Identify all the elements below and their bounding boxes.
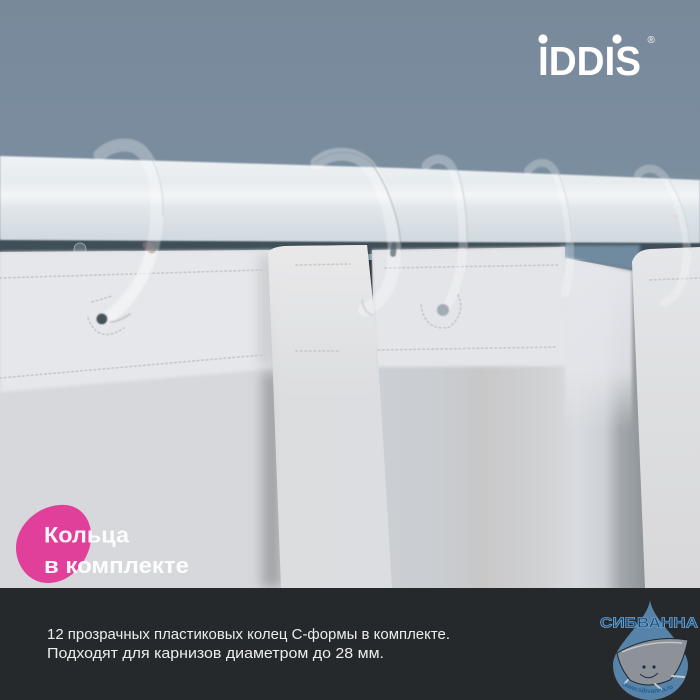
heading: Кольца в комплекте: [44, 522, 189, 578]
far curtain light band: [565, 258, 632, 430]
heading line 1: Кольца: [44, 522, 129, 548]
ring 5: [637, 167, 690, 303]
brand logo: IDDIS: [538, 34, 656, 84]
description line 2: Подходят для карнизов диаметром до 28 мм.: [47, 645, 384, 662]
panel: left curtain: [0, 250, 282, 588]
wall background: [0, 0, 700, 260]
front fold top highlight: [268, 245, 377, 400]
panel: middle curtain: [372, 247, 650, 588]
face: [640, 665, 658, 678]
middle curtain hem band: [372, 247, 567, 367]
ring 4: [526, 161, 573, 293]
bathtub: [617, 639, 688, 685]
tub legs: [624, 676, 684, 690]
mounting bump on wall: [74, 243, 86, 255]
transparent C-rings: [96, 143, 690, 324]
ring 2: [315, 152, 401, 315]
wall gap between curtain panels: [560, 245, 640, 272]
left curtain upper shadow: [258, 255, 278, 365]
panel: right curtain fold: [632, 247, 700, 588]
brand name: СИБВАННА: [600, 616, 699, 632]
pink blob badge: [16, 505, 91, 583]
curtain panels: [0, 245, 700, 588]
description line 1: 12 прозрачных пластиковых колец С-формы в комплекте.: [47, 626, 450, 643]
ring 1: [96, 143, 163, 324]
curtain rod shadow gap: [0, 238, 700, 254]
registered mark: ®: [648, 35, 656, 46]
website url: www.sibvanna.ru: [623, 682, 674, 693]
heading line 2: в комплекте: [44, 553, 189, 578]
logo dots: [538, 34, 548, 44]
ring 3: [424, 158, 467, 316]
panel: front fold: [268, 245, 392, 588]
water drop: [613, 600, 688, 700]
tub rim: [622, 642, 682, 652]
logo wordmark: IDDIS: [538, 38, 641, 84]
watermark logo: Сибванна: [600, 600, 699, 700]
description text: [47, 626, 450, 662]
curtain rod: [0, 156, 700, 243]
left curtain lower shadow: [262, 372, 282, 588]
left curtain hem band: [0, 250, 272, 392]
bottom dark panel: [0, 588, 700, 700]
stitched perforation rows: [0, 264, 700, 378]
